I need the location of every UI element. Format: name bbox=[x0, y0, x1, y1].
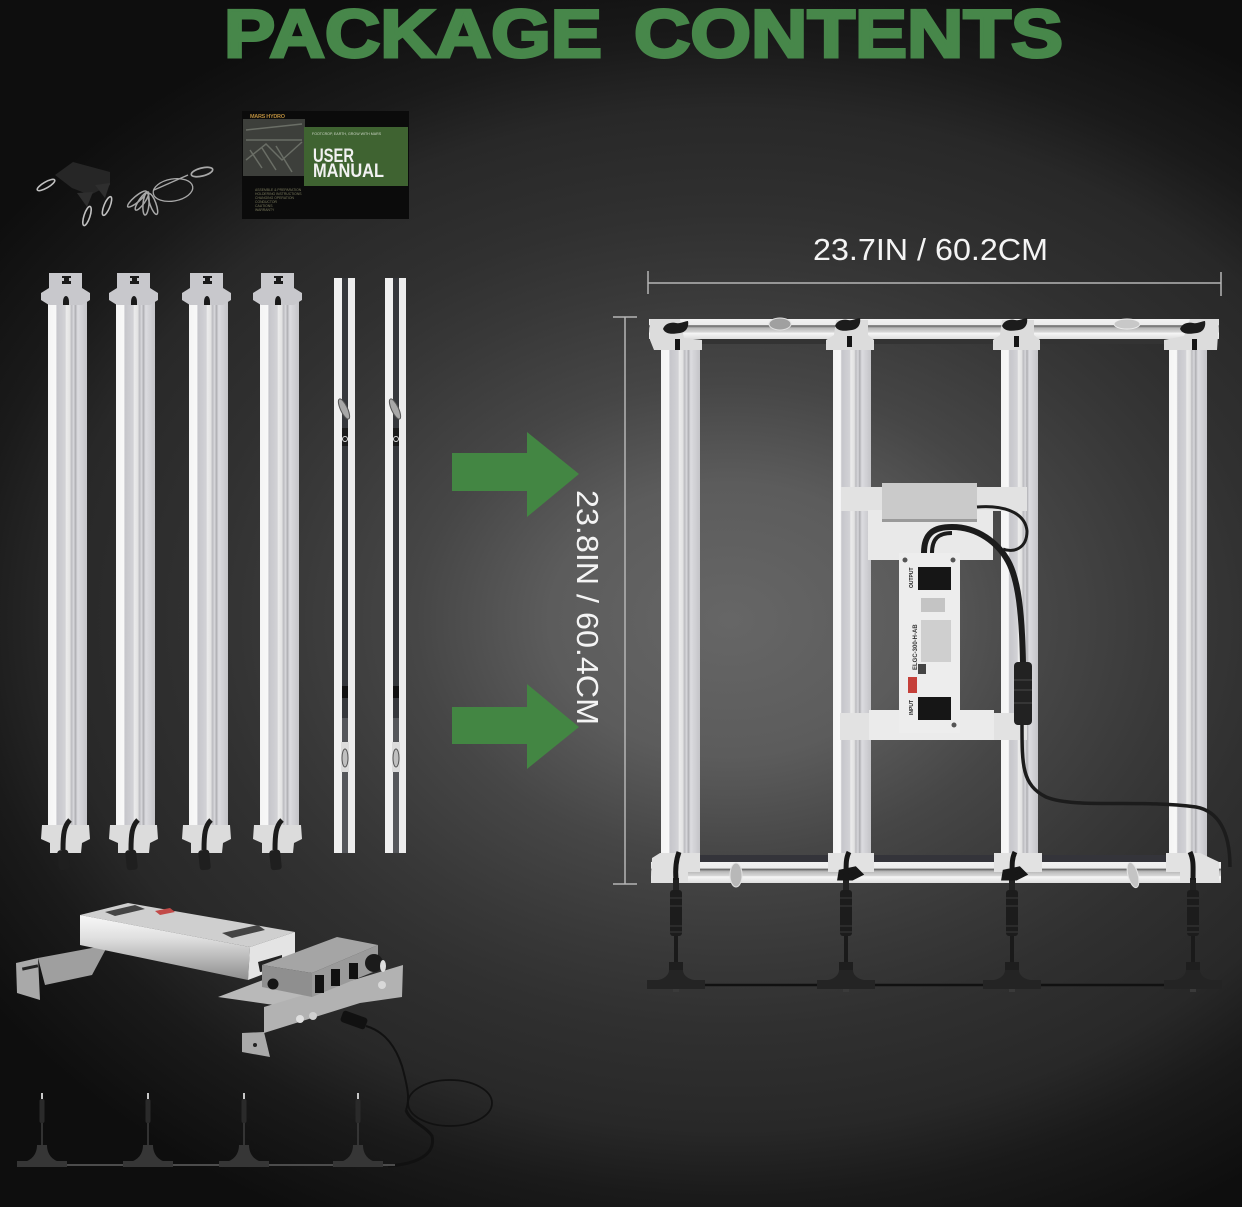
control box bracket bbox=[218, 965, 403, 1057]
bottom rail bbox=[651, 853, 1221, 889]
power bracket top bbox=[841, 483, 1027, 560]
power bracket bottom bbox=[840, 710, 1027, 740]
manual contents list: ASSEMBLE & PREPARATION bbox=[255, 188, 302, 192]
manual subtitle: FOOTCROP, EARTH, GROW WITH MARS bbox=[312, 132, 382, 136]
manual contents list: WARRANTY bbox=[255, 208, 275, 212]
manual heading line 2: MANUAL bbox=[313, 161, 384, 182]
driver input label: INPUT bbox=[909, 700, 915, 715]
T connector chain loose bbox=[17, 1093, 395, 1167]
manual contents list: HOLDERING INSTRUCTIONS bbox=[255, 192, 302, 196]
power cable bbox=[924, 507, 1230, 867]
height label: 23.8IN / 60.4CM bbox=[570, 490, 605, 725]
top knobs bbox=[663, 318, 1205, 350]
panel: four light bars bbox=[41, 273, 302, 870]
vertical bars bbox=[661, 345, 1207, 860]
manual photo bbox=[243, 119, 305, 176]
manual brand: MARS HYDRO bbox=[250, 114, 286, 120]
driver output label: OUTPUT bbox=[909, 567, 915, 588]
driver model text: ELGC-300-H-AB bbox=[913, 624, 919, 670]
left bracket bbox=[16, 945, 108, 1000]
manual green panel bbox=[304, 127, 408, 186]
manual contents list bbox=[255, 188, 302, 212]
driver cable bbox=[340, 1010, 492, 1166]
arrow: lower bbox=[452, 684, 579, 769]
top rail bbox=[649, 318, 1219, 350]
bottom knobs bbox=[676, 852, 1193, 880]
manual heading: USER bbox=[313, 146, 354, 167]
manual contents list: CAUTIONS bbox=[255, 204, 273, 208]
panel: two support rails bbox=[334, 278, 406, 853]
control box bbox=[262, 937, 386, 997]
manual contents list: CONDUCTOR bbox=[255, 200, 278, 204]
manual contents list: CHANGING OPERATION bbox=[255, 196, 294, 200]
width label: 23.7IN / 60.2CM bbox=[813, 232, 1048, 267]
T connector chain bbox=[647, 878, 1222, 992]
arrow: upper bbox=[452, 432, 579, 517]
height dimension line bbox=[613, 317, 637, 884]
icon: rope ratchet hangers bbox=[36, 162, 114, 226]
width dimension line bbox=[648, 271, 1221, 296]
user manual booklet bbox=[242, 111, 409, 219]
panel: driver assembly with bracket bbox=[16, 903, 492, 1166]
panel: assembled light frame bbox=[647, 318, 1230, 992]
driver unit bbox=[899, 553, 960, 733]
driver body bbox=[80, 903, 295, 980]
title bbox=[224, 0, 1063, 72]
icon: safety wire with carabiners bbox=[126, 165, 214, 215]
